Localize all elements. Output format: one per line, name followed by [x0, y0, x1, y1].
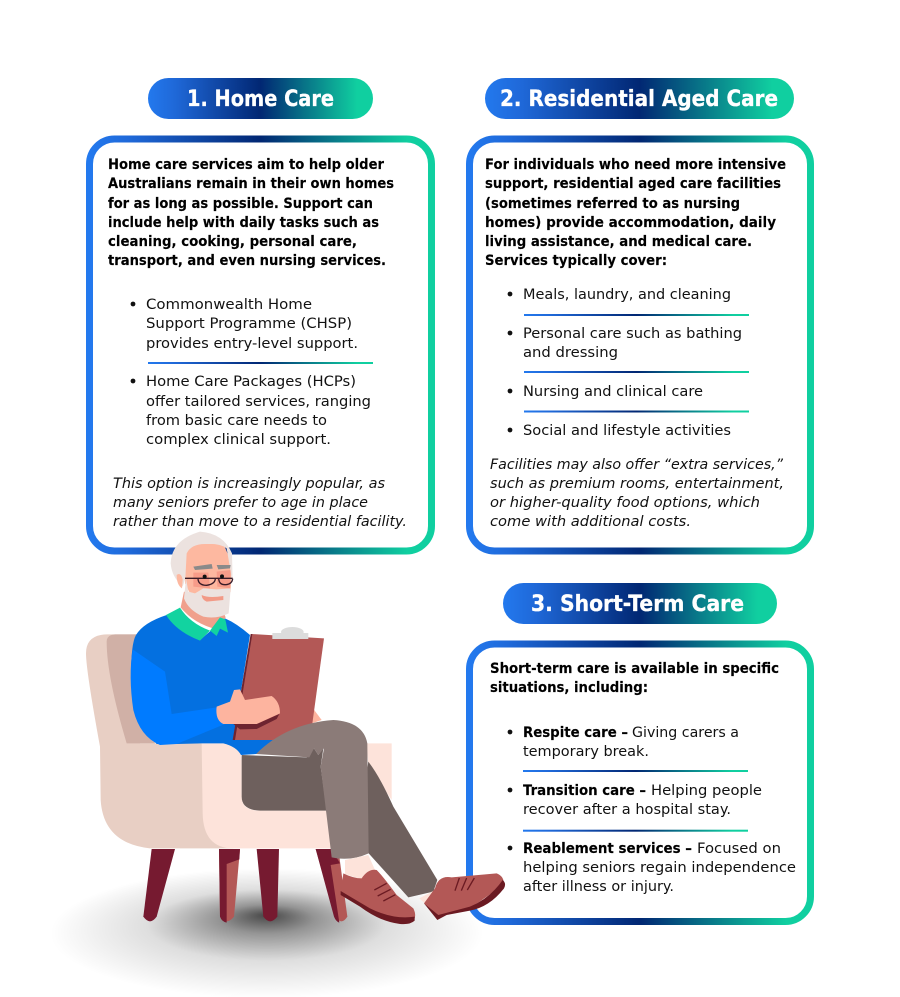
pill heading: 2. Residential Aged Care: [485, 78, 794, 119]
text block: short-term intro: [490, 661, 779, 696]
list: short-term services: recover after a hospital stay.: [523, 802, 731, 818]
text block: residential intro: For individuals who need more intensive: [485, 157, 786, 173]
text block: home care note: many seniors prefer to age in place: [113, 495, 368, 511]
list: residential services: Nursing and clinical care: [523, 384, 703, 400]
list: short-term services: Giving carers a: [632, 725, 739, 741]
head: [171, 532, 233, 617]
pill heading: 3. Short-Term Care: 3. Short-Term Care: [531, 592, 744, 617]
list: home care programmes: provides entry-level support.: [146, 336, 358, 352]
list: home care programmes: Support Programme (CHSP): [146, 316, 352, 332]
text block: residential note: such as premium rooms, entertainment,: [490, 476, 784, 492]
left shoe: [341, 870, 415, 924]
list: residential services: and dressing: [523, 345, 618, 361]
text block: residential intro: living assistance, and medical care.: [485, 234, 752, 250]
text block: residential intro: homes) provide accommodation, daily: [485, 215, 777, 231]
clipboard: [233, 627, 324, 740]
list: short-term services: Helping people: [651, 783, 762, 799]
text block: home care intro: Australians remain in their own homes: [108, 176, 394, 192]
list: residential services: Social and lifestyle activities: [523, 423, 731, 439]
text block: home care note: This option is increasingly popular, as: [113, 476, 385, 492]
text block: residential note: Facilities may also offer “extra services,”: [490, 457, 784, 473]
text block: residential intro: Services typically cover:: [485, 253, 667, 269]
list: residential services: Meals, laundry, and cleaning: [523, 287, 731, 303]
list: home care programmes: Home Care Packages (HCPs): [146, 374, 356, 390]
text block: home care intro: include help with daily tasks such as: [108, 215, 379, 231]
list: home care programmes: [131, 297, 373, 448]
text block: home care intro: transport, and even nursing services.: [108, 253, 386, 269]
list: home care programmes: offer tailored services, ranging: [146, 394, 371, 410]
text block: residential note: come with additional costs.: [490, 514, 691, 530]
list: home care programmes: complex clinical support.: [146, 432, 331, 448]
list: short-term services: helping seniors regain independence: [523, 860, 796, 876]
list: short-term services: Respite care –: [523, 725, 628, 741]
panel: short-term care: [470, 644, 810, 922]
trousers: [242, 720, 437, 897]
pill heading: 2. Residential Aged Care: 2. Residential Aged Care: [500, 87, 778, 112]
text block: home care intro: [108, 157, 394, 269]
list: short-term services: Focused on: [697, 841, 781, 857]
text block: home care intro: cleaning, cooking, personal care,: [108, 234, 357, 250]
text block: home care note: rather than move to a residential facility.: [113, 514, 407, 530]
neck and collar: [166, 592, 228, 641]
text block: residential intro: [485, 157, 786, 269]
right shoe: [424, 873, 505, 920]
armchair: [86, 634, 392, 923]
floor shadow: [50, 868, 483, 997]
list: residential services: [508, 287, 749, 439]
text block: short-term intro: situations, including:: [490, 680, 648, 696]
socks: [345, 855, 439, 903]
sweater: [131, 615, 275, 755]
pill heading: 3. Short-Term Care: [503, 583, 777, 624]
text block: home care note: [113, 476, 407, 530]
hand: [216, 689, 280, 729]
list: short-term services: [508, 725, 796, 895]
text block: home care intro: for as long as possible. Support can: [108, 196, 373, 212]
list: home care programmes: Commonwealth Home: [146, 297, 312, 313]
text block: residential intro: (sometimes referred to as nursing: [485, 196, 740, 212]
pill heading: 1. Home Care: [148, 78, 373, 119]
illustration: older man reading in an armchair: [50, 532, 505, 997]
list: short-term services: Transition care –: [523, 783, 646, 799]
pill heading: 1. Home Care: 1. Home Care: [187, 87, 334, 112]
list: short-term services: Reablement services –: [523, 841, 692, 857]
list: residential services: Personal care such as bathing: [523, 326, 742, 342]
list: short-term services: after illness or injury.: [523, 879, 674, 895]
glasses: [185, 574, 233, 585]
list: home care programmes: from basic care needs to: [146, 413, 327, 429]
text block: residential note: [490, 457, 784, 530]
text block: residential intro: support, residential aged care facilities: [485, 176, 781, 192]
text block: home care intro: Home care services aim to help older: [108, 157, 385, 173]
text block: residential note: or higher-quality food options, which: [490, 495, 760, 511]
panel: home care: [90, 139, 432, 551]
list: short-term services: temporary break.: [523, 744, 649, 760]
panel: residential aged care: [470, 139, 810, 551]
text block: short-term intro: Short-term care is available in specific: [490, 661, 779, 677]
